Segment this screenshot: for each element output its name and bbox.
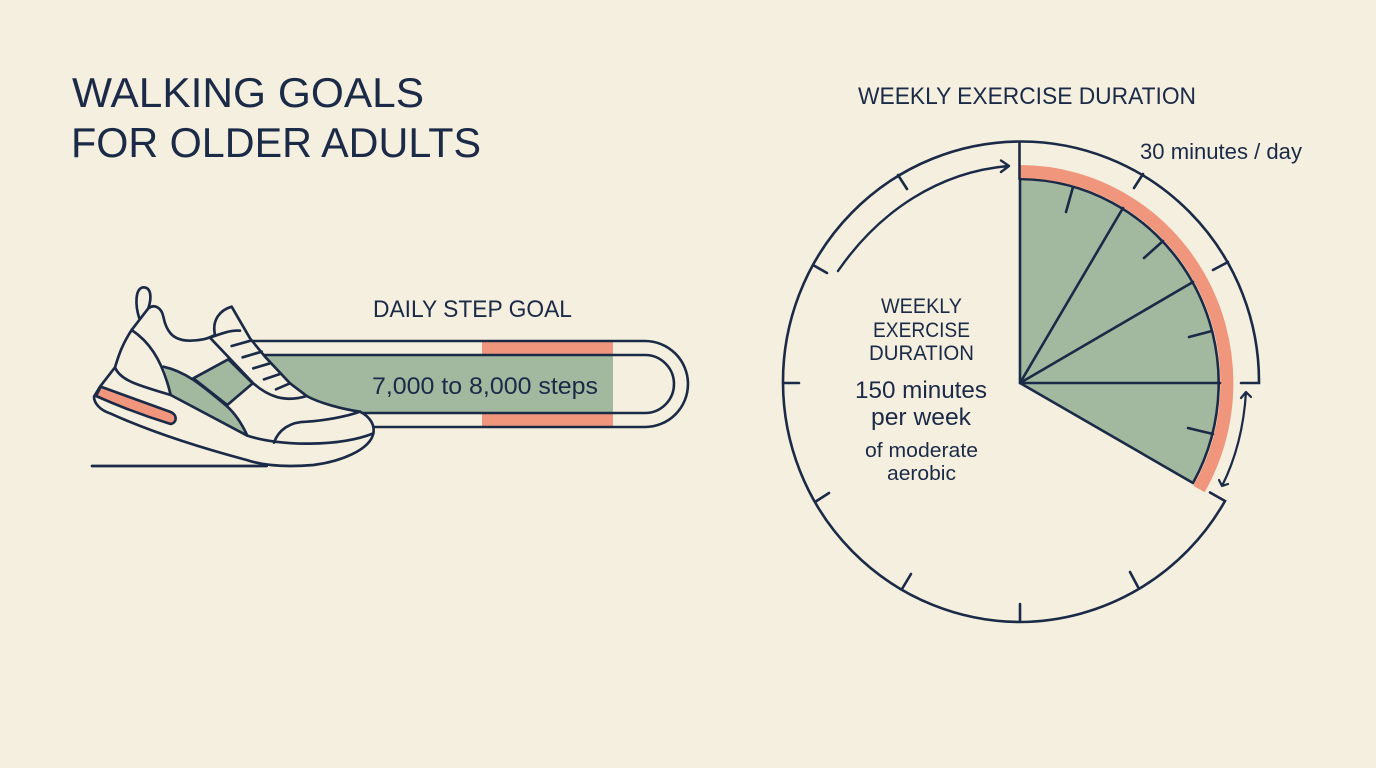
center text: dial label: WEEKLY [881, 295, 962, 318]
progress bar [250, 341, 688, 427]
center text: dial label: DURATION [869, 342, 974, 365]
icon: walking shoe [92, 287, 374, 466]
center text: 150 minutes per week: per week [871, 404, 972, 431]
title: WALKING GOALS [72, 69, 424, 116]
title: FOR OLDER ADULTS [71, 119, 481, 166]
heading: weekly exercise duration: WEEKLY EXERCISE DURATION [858, 83, 1196, 110]
center text: dial label [869, 295, 974, 365]
dial: outer ring with ticks [783, 141, 1259, 622]
center text: of moderate aerobic: of moderate [865, 440, 978, 462]
center text: 150 minutes per week [855, 377, 987, 431]
dial: coral progress arc [1020, 172, 1227, 489]
arrow: double-headed segment span [1219, 392, 1251, 486]
label: 30 minutes per day: 30 minutes / day [1140, 139, 1302, 164]
panel: weekly exercise duration [783, 83, 1302, 622]
dial: green sector [1020, 179, 1219, 483]
center text: 150 minutes per week: 150 minutes [855, 377, 987, 404]
center text: of moderate aerobic [865, 440, 978, 485]
center text: of moderate aerobic: aerobic [887, 463, 956, 485]
center text: dial label: EXERCISE [873, 319, 970, 342]
panel: daily step goal [92, 287, 688, 466]
arrow: clockwise to top [838, 160, 1009, 271]
dial: sector dividers [1020, 187, 1220, 434]
step count label: 7,000 to 8,000 steps [372, 373, 598, 400]
title [71, 69, 481, 166]
heading: daily step goal: DAILY STEP GOAL [373, 296, 572, 323]
